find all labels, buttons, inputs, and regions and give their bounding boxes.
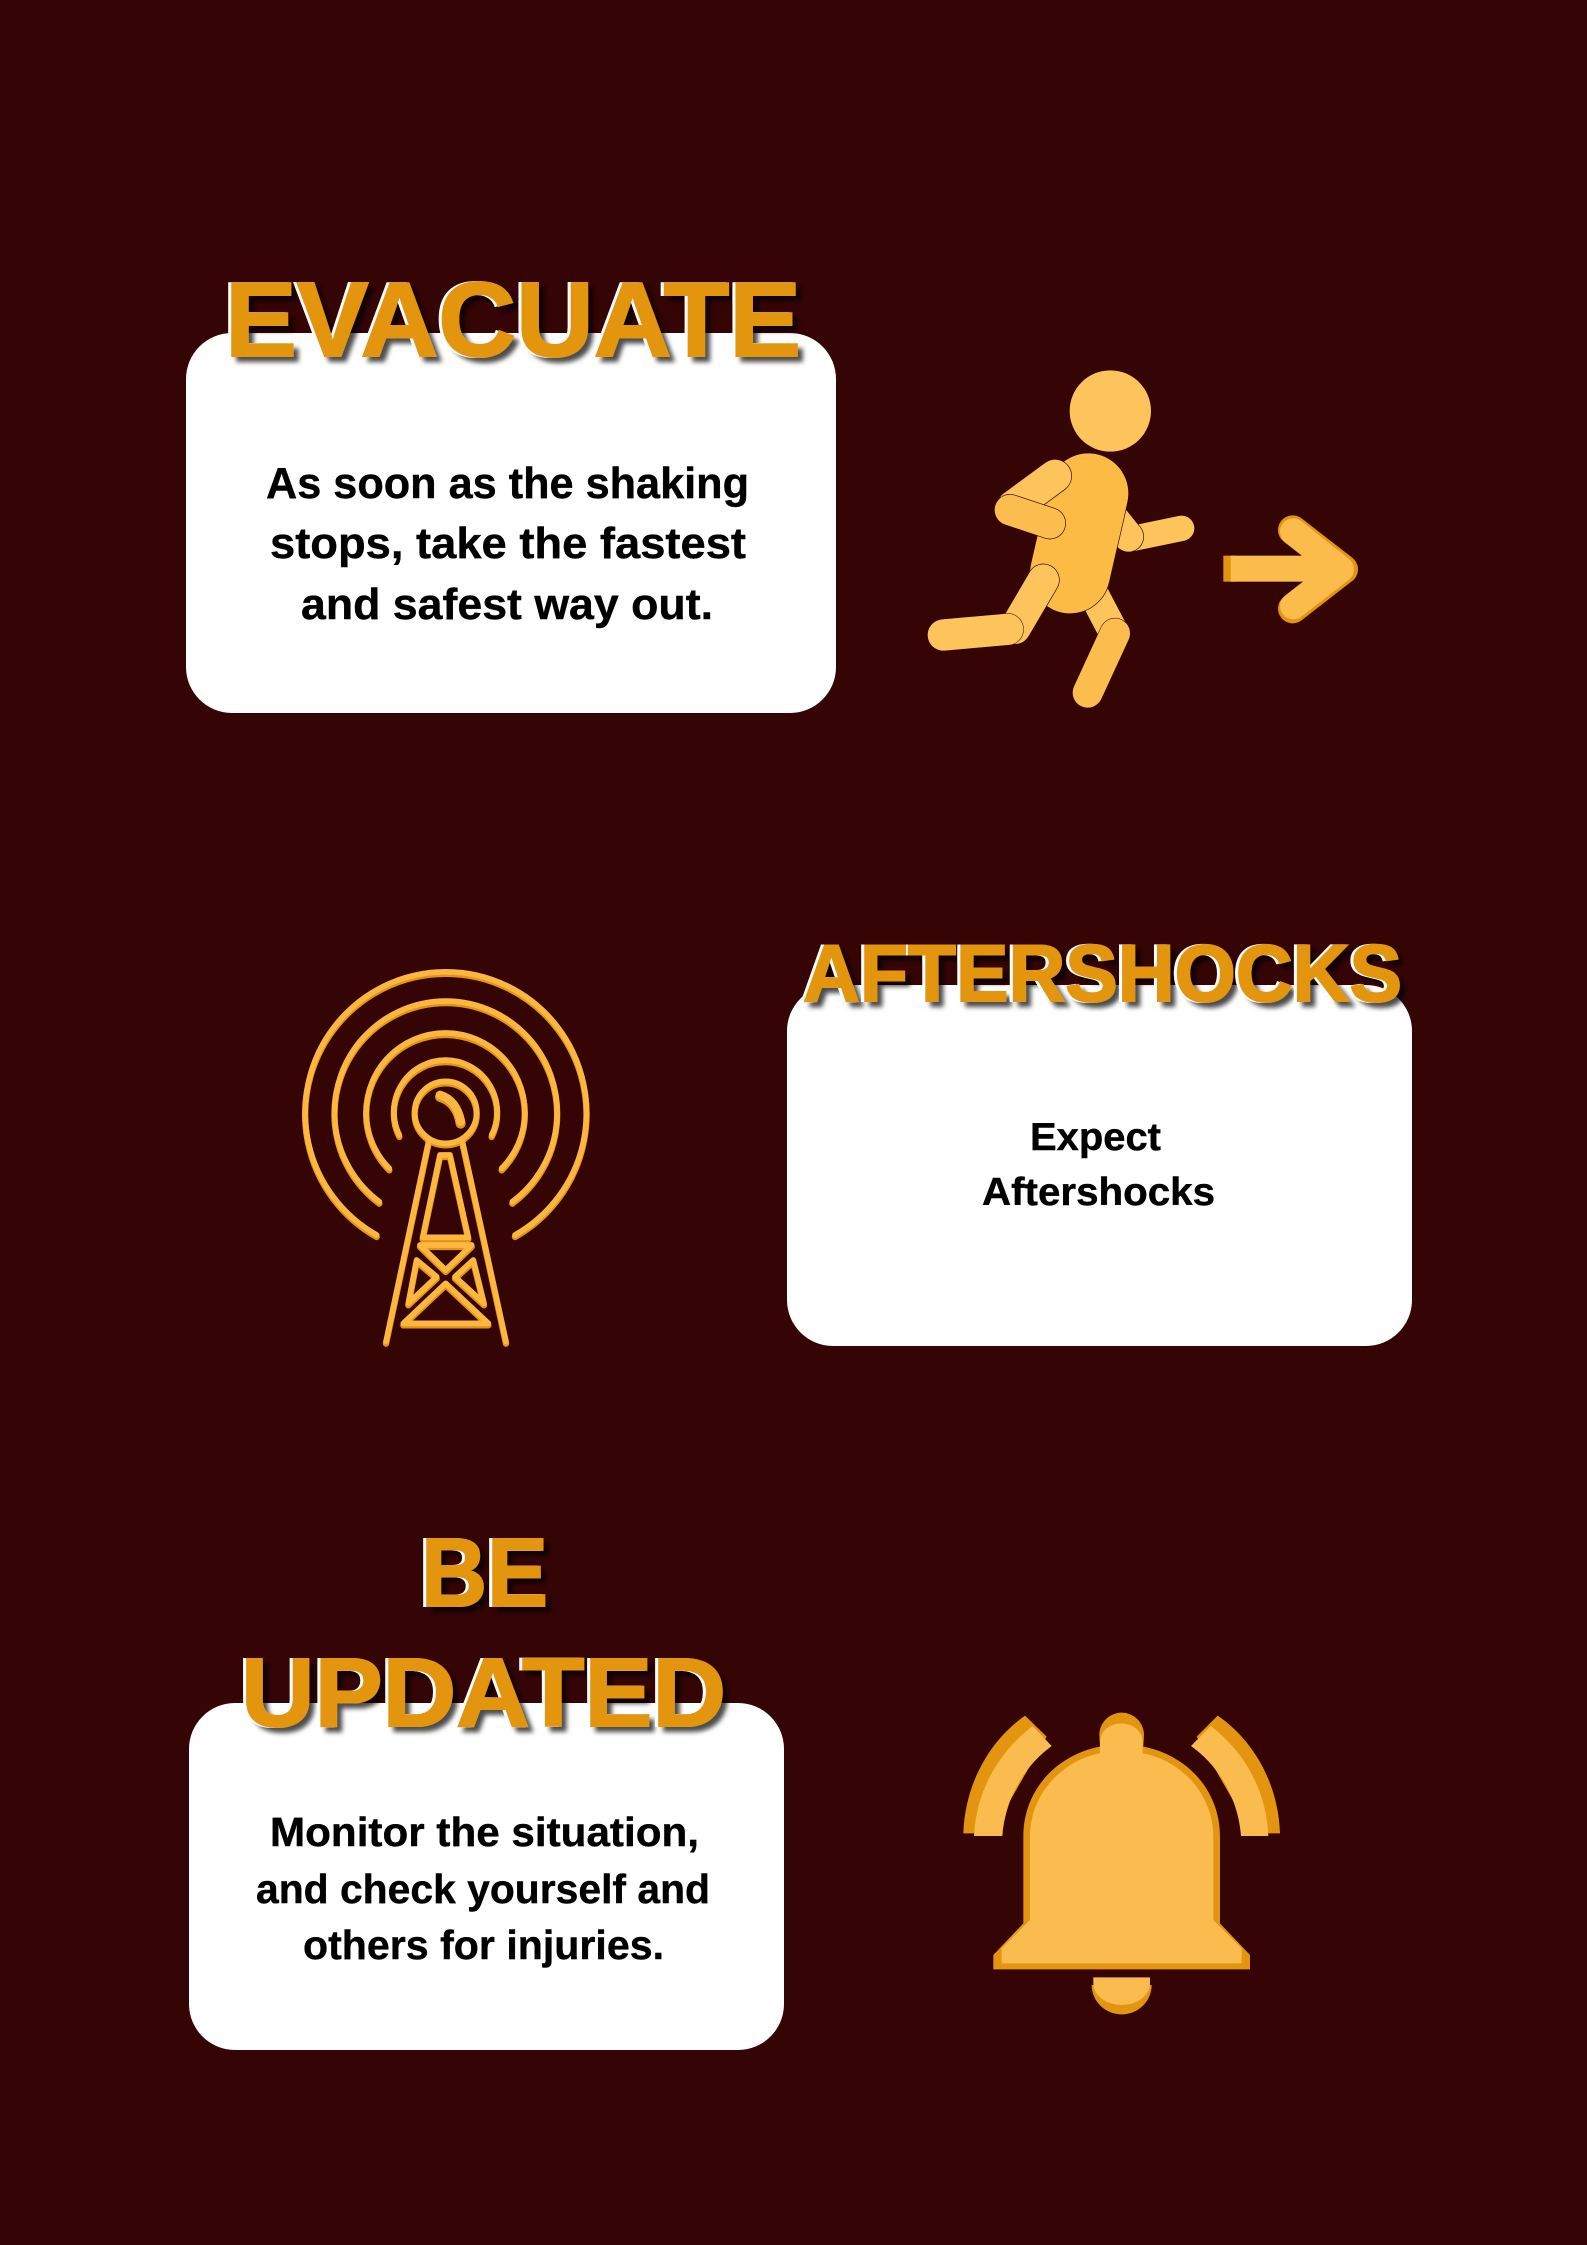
- icon: radio tower: [305, 972, 586, 1344]
- text: monitor instructions: and check yourself and: [256, 1866, 710, 1912]
- icon: running person: [943, 370, 1182, 693]
- text: monitor instructions: [256, 1809, 710, 1968]
- heading: BE UPDATED: [241, 1518, 726, 1747]
- icon: arrow: [1223, 530, 1343, 609]
- text: monitor instructions: others for injuries.: [303, 1922, 664, 1968]
- icon: ringing bell: [963, 1713, 1280, 2014]
- heading: BE UPDATED: UPDATED: [241, 1638, 726, 1747]
- text: expect aftershocks: Aftershocks: [982, 1171, 1215, 1214]
- text: expect aftershocks: Expect: [1030, 1116, 1161, 1159]
- heading: AFTERSHOCKS: AFTERSHOCKS: [803, 929, 1402, 1019]
- text: evacuate instructions: stops, take the fastest: [270, 519, 746, 568]
- card: be updated: [189, 1703, 784, 2050]
- text: expect aftershocks: [982, 1116, 1215, 1214]
- card: aftershocks: [787, 985, 1412, 1346]
- panel: be updated: [189, 1518, 784, 2050]
- text: evacuate instructions: As soon as the shaking: [266, 459, 749, 508]
- panel: evacuate: [186, 261, 836, 713]
- panel: aftershocks: [787, 929, 1412, 1346]
- card: evacuate: [186, 333, 836, 713]
- heading: BE UPDATED: BE: [421, 1518, 548, 1627]
- text: monitor instructions: Monitor the situation,: [270, 1809, 699, 1855]
- heading: EVACUATE: EVACUATE: [225, 261, 801, 379]
- text: evacuate instructions: [266, 459, 749, 629]
- text: evacuate instructions: and safest way out.: [301, 580, 713, 629]
